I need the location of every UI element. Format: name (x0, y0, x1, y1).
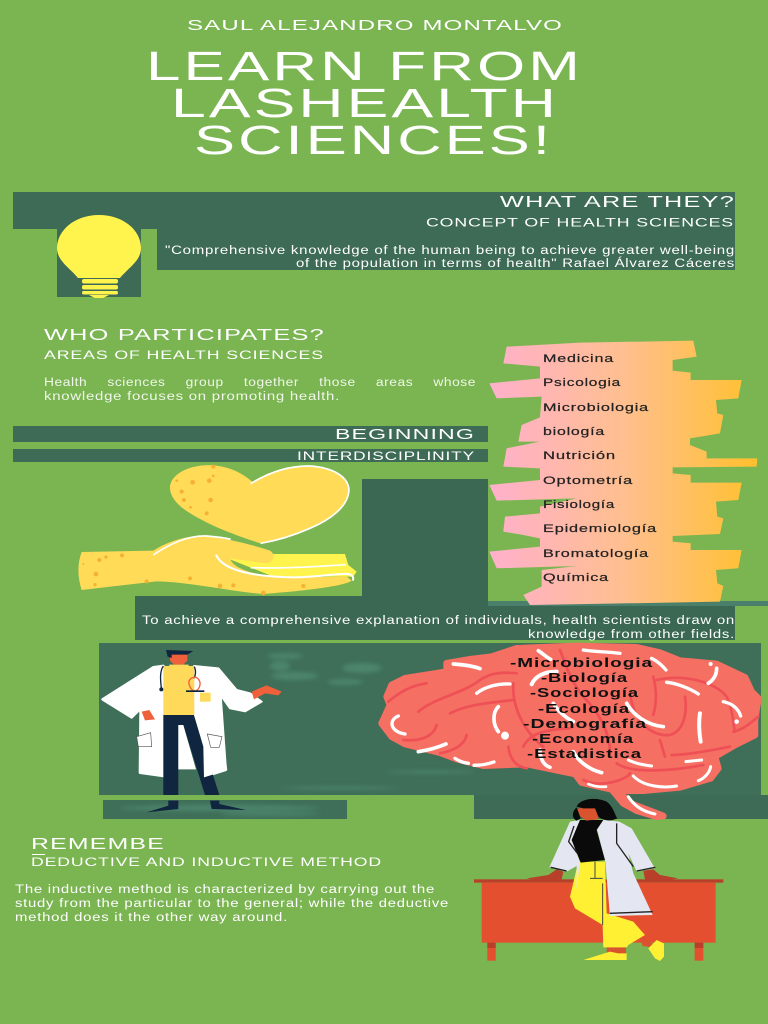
list of health areas: Fisiología (543, 499, 615, 511)
brush strokes list (489, 341, 757, 605)
text: inductive method: method does it the other way around. (15, 912, 288, 924)
list of health areas: Optometría (543, 475, 633, 487)
title: LASHEALTH (171, 80, 559, 126)
list of health areas: Psicologia (543, 377, 621, 389)
quote (165, 245, 735, 270)
panel: what are they (13, 192, 735, 298)
icon: heart and hand (78, 465, 357, 595)
icon: light bulb (57, 215, 141, 298)
quote: "Comprehensive knowledge of the human being to achieve greater well-being (165, 245, 735, 257)
list of health areas (543, 353, 657, 584)
text: health sciences intro line one: Health sciences group together those areas whose (44, 377, 476, 389)
text: inductive method (15, 884, 449, 924)
panel: doctor and brain (99, 643, 768, 819)
quote: of the population in terms of health" Rafael Álvarez Cáceres (296, 257, 735, 270)
list of health areas: biología (543, 426, 605, 438)
doctor illustration (103, 650, 282, 812)
band behind list (488, 601, 768, 606)
callout: interdisciplinary text (142, 615, 735, 641)
brain list of disciplines: -Biología (541, 671, 629, 685)
subheading: areas of health sciences: AREAS OF HEALTH SCIENCES (44, 348, 324, 362)
brain illustration (382, 646, 758, 817)
woman at desk illustration (474, 799, 723, 961)
bar: interdisciplinity: INTERDISCIPLINITY (297, 451, 475, 463)
bar: interdisciplinity (13, 449, 488, 463)
heading: what are they: WHAT ARE THEY? (500, 194, 735, 211)
list of health areas: Bromatología (543, 548, 649, 560)
author name: SAUL ALEJANDRO MONTALVO (187, 17, 563, 34)
title: LEARN FROM (146, 43, 583, 89)
list of health areas: Microbiologia (543, 402, 649, 414)
title: SCIENCES! (194, 117, 553, 163)
text: inductive method: The inductive method is characterized by carrying out the (15, 884, 435, 896)
brain list of disciplines: -Microbiologia (510, 656, 654, 670)
title (146, 43, 583, 163)
brain list of disciplines: -Demografía (523, 717, 648, 731)
brain list of disciplines: -Economía (532, 732, 635, 746)
text: health sciences intro line two: knowledge focuses on promoting health. (44, 391, 340, 403)
brain list of disciplines: -Ecología (538, 702, 631, 716)
bar: beginning (13, 426, 488, 443)
decorative dash (32, 854, 45, 855)
heading: who participates: WHO PARTICIPATES? (44, 327, 325, 344)
heading: remember: REMEMBE (31, 836, 165, 853)
text: inductive method: study from the particular to the general; while the deductive (15, 898, 449, 910)
callout: interdisciplinary text: knowledge from other fields. (528, 629, 735, 641)
brain list of disciplines: -Estadistica (527, 747, 643, 761)
callout: interdisciplinary text: To achieve a comprehensive explanation of individuals, health scientists draw on (142, 615, 735, 627)
brain list of disciplines (510, 656, 654, 761)
list of health areas: Medicina (543, 353, 614, 365)
brain list of disciplines: -Sociología (530, 686, 640, 700)
list of health areas: Epidemiología (543, 523, 657, 535)
list of health areas: Química (543, 572, 609, 584)
subheading: deductive and inductive method: DEDUCTIVE AND INDUCTIVE METHOD (31, 857, 382, 869)
subheading: concept: CONCEPT OF HEALTH SCIENCES (426, 216, 734, 230)
list of health areas: Nutrición (543, 450, 616, 462)
panel: heart backdrop (135, 479, 735, 640)
bar: beginning: BEGINNING (335, 427, 475, 443)
